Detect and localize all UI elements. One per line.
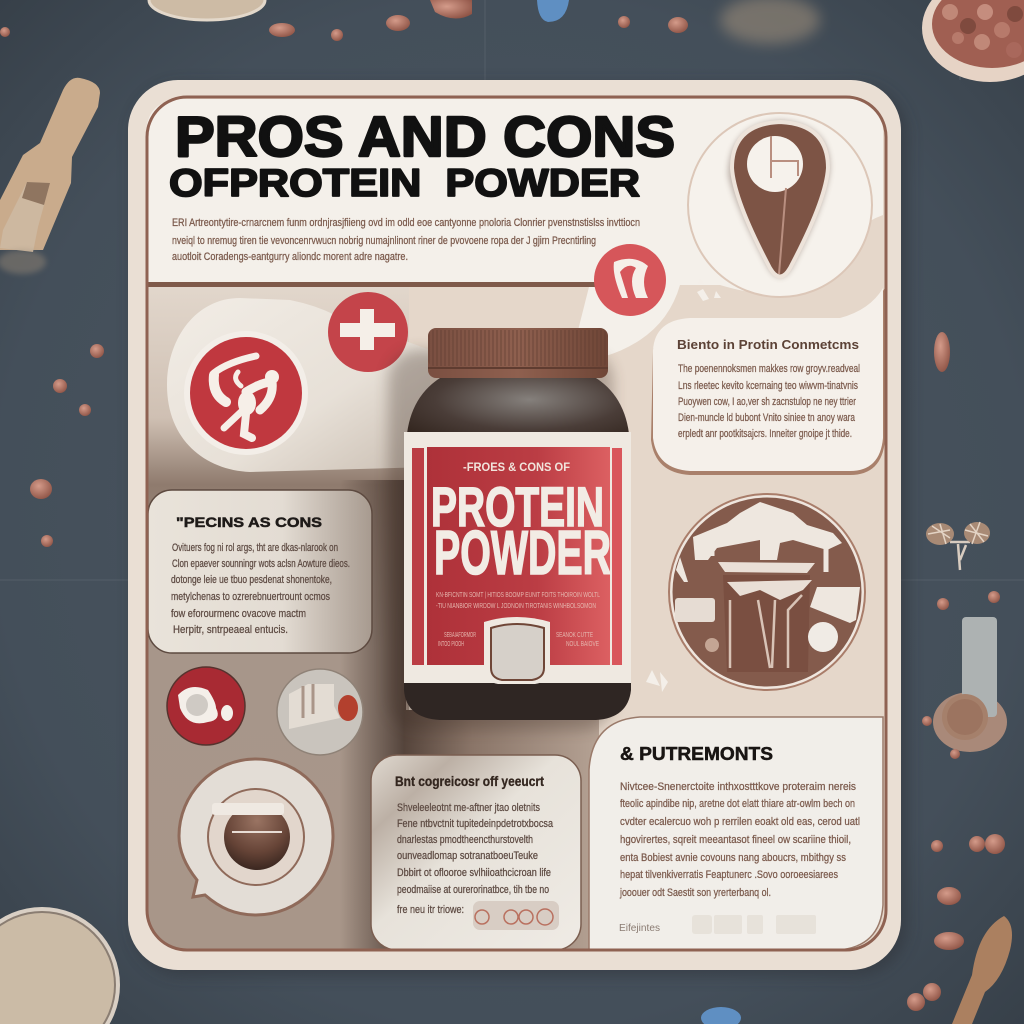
heading: "PECINS AS CONS [176, 514, 322, 530]
inner background tones [147, 285, 599, 950]
icon panel: figure blob [167, 298, 430, 472]
text block: Puoywen cow, I ao,ver sh zacnstulop ne ney ttrier [678, 396, 856, 408]
text block: hgovirertes, sqreit meeantasot fineel ow scariine thioil, [620, 834, 851, 846]
panel: pros and cons card [148, 490, 372, 653]
title [169, 105, 675, 205]
label fine print: -TIU NIANBIOR WIRDOW L JODNOIN TIROTANIS WINHBOLSOMON [436, 603, 596, 610]
heading: & PUTREMONTS [620, 744, 773, 764]
decor: glass tube and cork [933, 617, 1007, 752]
icon: red badge with curl [594, 244, 666, 316]
decor: powder bowl bottom left [0, 907, 120, 1024]
heading: Bnt cogreicosr off yeeucrt [395, 774, 544, 789]
text block [678, 363, 860, 440]
decor: blue pieces [537, 0, 741, 1024]
label fine print: SEANOK CUTTE [556, 632, 593, 639]
text block: fow eforourmenc ovacove mactm [171, 608, 306, 620]
heading: Biento in Protin Conmetcms [677, 338, 859, 352]
text block: Herpitr, sntrpeaeal entucis. [173, 624, 288, 636]
label scoop emblem [484, 617, 550, 684]
panel: dosage card [371, 755, 581, 950]
text block: Lns rleetec kevito kcernaing teo wiwvm-tinatvnis [678, 380, 858, 392]
panel: main board [128, 80, 908, 976]
decor: spilled powder top right [720, 0, 820, 44]
text block: Clon epaever sounningr wots aclsn Aowture dieos. [172, 558, 350, 570]
icon: map pin [688, 113, 872, 297]
footnote tag with torn paper strips: Eifejintes [619, 923, 660, 934]
jar shadow [388, 350, 613, 730]
text block: Ovituers fog ni rol args, tht are dkas-nlarook on [172, 542, 338, 554]
text block: Nivtcee-Snenerctoite inthxostttkove proteraim nereis [620, 781, 856, 793]
label fine print: INTOO PIOOH [438, 641, 464, 648]
text block [619, 781, 860, 899]
icon: red flower badge [167, 667, 245, 745]
icon: plus badge [328, 292, 408, 372]
text block: ounveadlomap sotranatboeuTeuke [397, 850, 538, 862]
panel: top header card [146, 99, 883, 362]
text block: fre neu itr triowe: [397, 904, 464, 916]
text block: Shveleeleotnt me-aftner jtao oletnits [397, 802, 540, 814]
icon: glass badge [277, 669, 363, 755]
text block: cvdter ecalercuo woh p rerrilen eoakt old eas, cerod uatl [620, 816, 860, 828]
jar lid [428, 328, 608, 378]
panel: requirements card [589, 717, 883, 950]
text block: peodmaiise at ourerorinatbce, tih tbe no [397, 884, 549, 896]
icon: speech ring with sphere [179, 759, 333, 915]
decor: powder bowl top [149, 0, 265, 20]
chip: rings [473, 901, 559, 930]
text block: hepat tilvenkiverratis Feaptunerc .Sovo ooroeesiarees [620, 869, 838, 881]
intro text: nveiql to nremug tiren tie vevoncenrvwucn nobrig numajnlinont riner de pvovoene ropa der J gjirn Precntirling [172, 235, 596, 247]
text block: dotonge leie ue tbuo pesdenat shonentoke, [171, 574, 332, 586]
decor: wooden scoop [0, 78, 100, 274]
label heading: -FROES & CONS OF [463, 460, 570, 474]
label product name: PROTEIN [431, 475, 604, 538]
panel: benefits card [651, 288, 885, 475]
intro text [172, 217, 640, 263]
label fine print: SEBAIAFORMOR [444, 632, 476, 639]
protein powder jar [404, 328, 631, 720]
label fine print: KN-BFICNTIN SOMT | HITIOS BOOMP EUNIT FOITS THOIROIN WOLTL [436, 592, 600, 599]
footnote tag with torn paper strips [619, 915, 816, 934]
text block [397, 802, 554, 916]
decor: wooden spoon [952, 916, 1012, 1024]
icon: running figure [214, 356, 279, 438]
decor: bean bowl top right [922, 0, 1024, 82]
text block: dnarlestas pmodtheencthurstovelth [397, 834, 533, 846]
text block: The poenennoksmen makkes row groyv.readveal [678, 363, 860, 375]
label product name: POWDER [434, 519, 611, 588]
text block: fteolic apindibe nip, aretne dot elatt thiare atr-owlm bech on [620, 798, 855, 810]
text block: Fene ntbvctnit tupitedeinpdetrotxbocsa [397, 818, 554, 830]
text block [171, 542, 350, 636]
intro text: auotloit Coradengs-eantgurry aliondc morent adre nagatre. [172, 251, 408, 263]
text block: enta Bobiest avnie covouns nang aboucrs, mbithgy ss [620, 852, 846, 864]
title: PROS AND CONS [175, 105, 675, 169]
title: OFPROTEIN POWDER [169, 162, 640, 205]
icon: round illustration [669, 494, 865, 690]
text block: Dien-muncle ld bubont Vnito siniee tn anoy wara [678, 412, 856, 424]
text block: metylchenas to ozrerebnuertrount ocmos [171, 591, 330, 603]
decor: acorn sprig [926, 522, 990, 570]
text block: Dbbirt ot oflooroe svlhiioathcicroan life [397, 867, 551, 879]
label fine print [436, 592, 600, 648]
label fine print: NOUL BAIOVE [566, 641, 599, 648]
text block: erpledt anr pootkitsajcrs. Inneiter gnoipe jt thide. [678, 428, 852, 440]
jar label [404, 432, 631, 684]
intro text: ERI Artreontytire-crnarcnem funm ordnjrasjfiieng ovd im odld eoe cantyonne pnoloria Clonrier pvenstnstislss invttiocn [172, 217, 640, 229]
text block: jooouer odt Saestit son yrerterbanq ol. [619, 887, 771, 899]
icon: small confetti [646, 278, 721, 692]
label product name [431, 475, 611, 588]
